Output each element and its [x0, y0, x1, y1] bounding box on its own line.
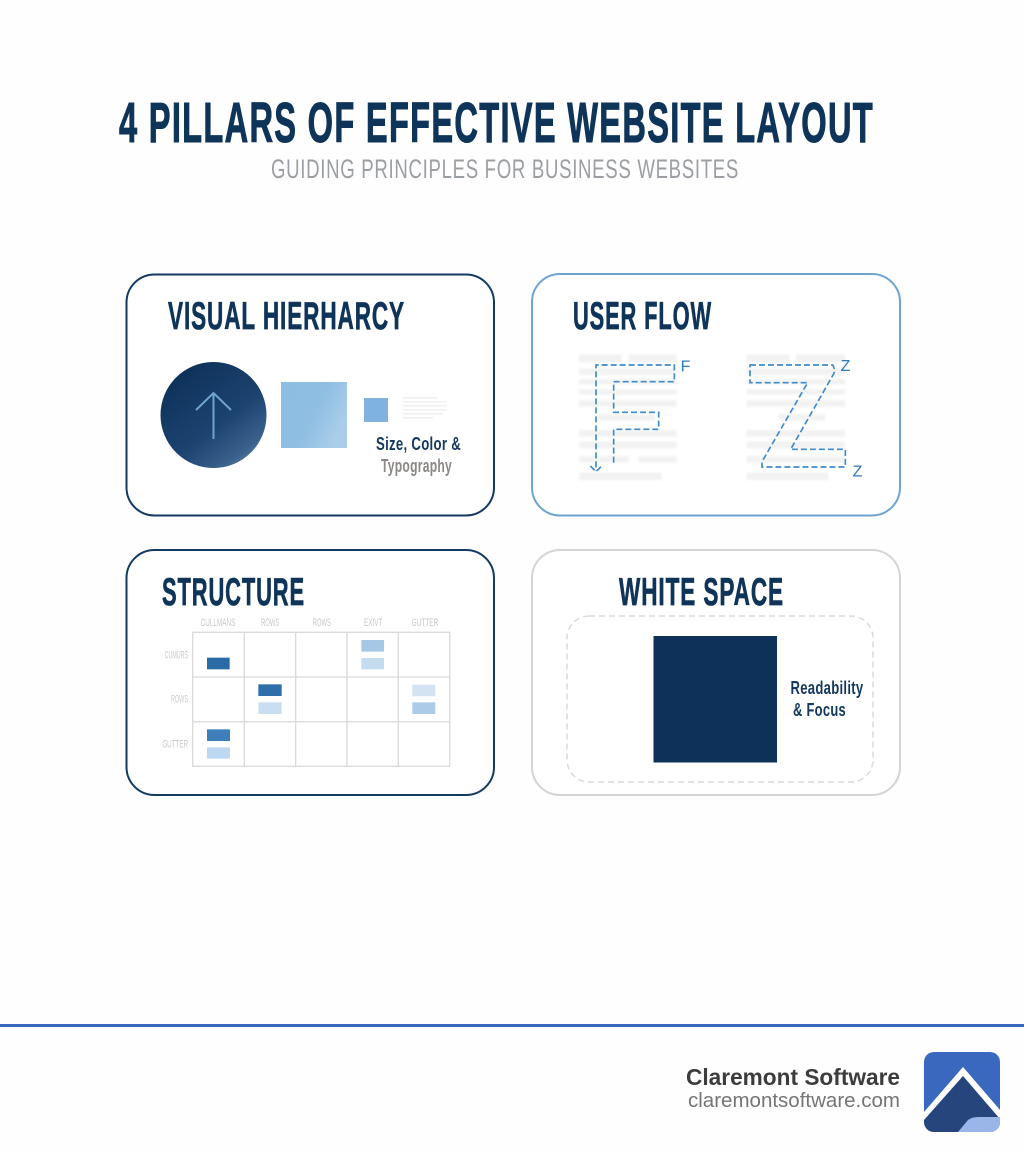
- panel: white space: [532, 550, 900, 795]
- label: readability and focus: Readability: [790, 678, 864, 698]
- diagram: F and Z reading patterns: [579, 354, 863, 480]
- label: readability and focus: [790, 678, 864, 720]
- footer: [0, 1024, 1024, 1132]
- icon: circle with up arrow: [160, 362, 266, 468]
- letter Z top: Z: [841, 358, 851, 375]
- logo: [924, 1052, 1000, 1132]
- F path: [590, 365, 674, 472]
- heading: visual hierarchy: VISUAL HIERHARCY: [168, 295, 405, 338]
- large light blue square: [281, 382, 347, 448]
- column labels: CULLMANS: [201, 617, 235, 629]
- panel: visual hierarchy: [126, 274, 494, 516]
- panel: structure: [126, 550, 494, 795]
- footer brand name: Claremont Software: [686, 1064, 900, 1090]
- heading: structure: STRUCTURE: [162, 571, 305, 614]
- dark content square: [654, 636, 777, 762]
- row labels: [162, 650, 188, 750]
- Z pattern text lines: [747, 354, 845, 480]
- letter F: F: [681, 359, 691, 376]
- footer website: claremontsoftware.com: [688, 1090, 900, 1112]
- grid chart: [162, 617, 450, 766]
- label: size, color and typography: Typography: [381, 456, 452, 476]
- column labels: EXIVT: [364, 617, 383, 629]
- column labels: ROWS: [261, 617, 279, 629]
- column labels: GUTTER: [412, 617, 439, 629]
- label: readability and focus: & Focus: [793, 700, 846, 720]
- small blue square: [364, 398, 388, 422]
- label: size, color and typography: Size, Color &: [376, 434, 461, 454]
- dashed margin frame: [567, 616, 873, 782]
- column labels: [201, 617, 439, 629]
- letter Z bottom: Z: [853, 463, 863, 480]
- row labels: CUMURS: [165, 650, 188, 662]
- highlighted cells: [207, 640, 435, 759]
- label: size, color and typography: [376, 434, 461, 476]
- grid lines: [193, 632, 450, 766]
- column labels: ROWS: [313, 617, 331, 629]
- panel: user flow: [532, 274, 900, 516]
- Z path: [750, 365, 845, 467]
- subtitle: GUIDING PRINCIPLES FOR BUSINESS WEBSITES: [271, 154, 739, 184]
- row labels: ROWS: [171, 694, 188, 706]
- heading: user flow: USER FLOW: [573, 295, 712, 338]
- heading: white space: WHITE SPACE: [619, 571, 784, 614]
- row labels: GUTTER: [162, 738, 188, 750]
- tiny text lines: [403, 397, 447, 418]
- F pattern text lines: [579, 354, 677, 480]
